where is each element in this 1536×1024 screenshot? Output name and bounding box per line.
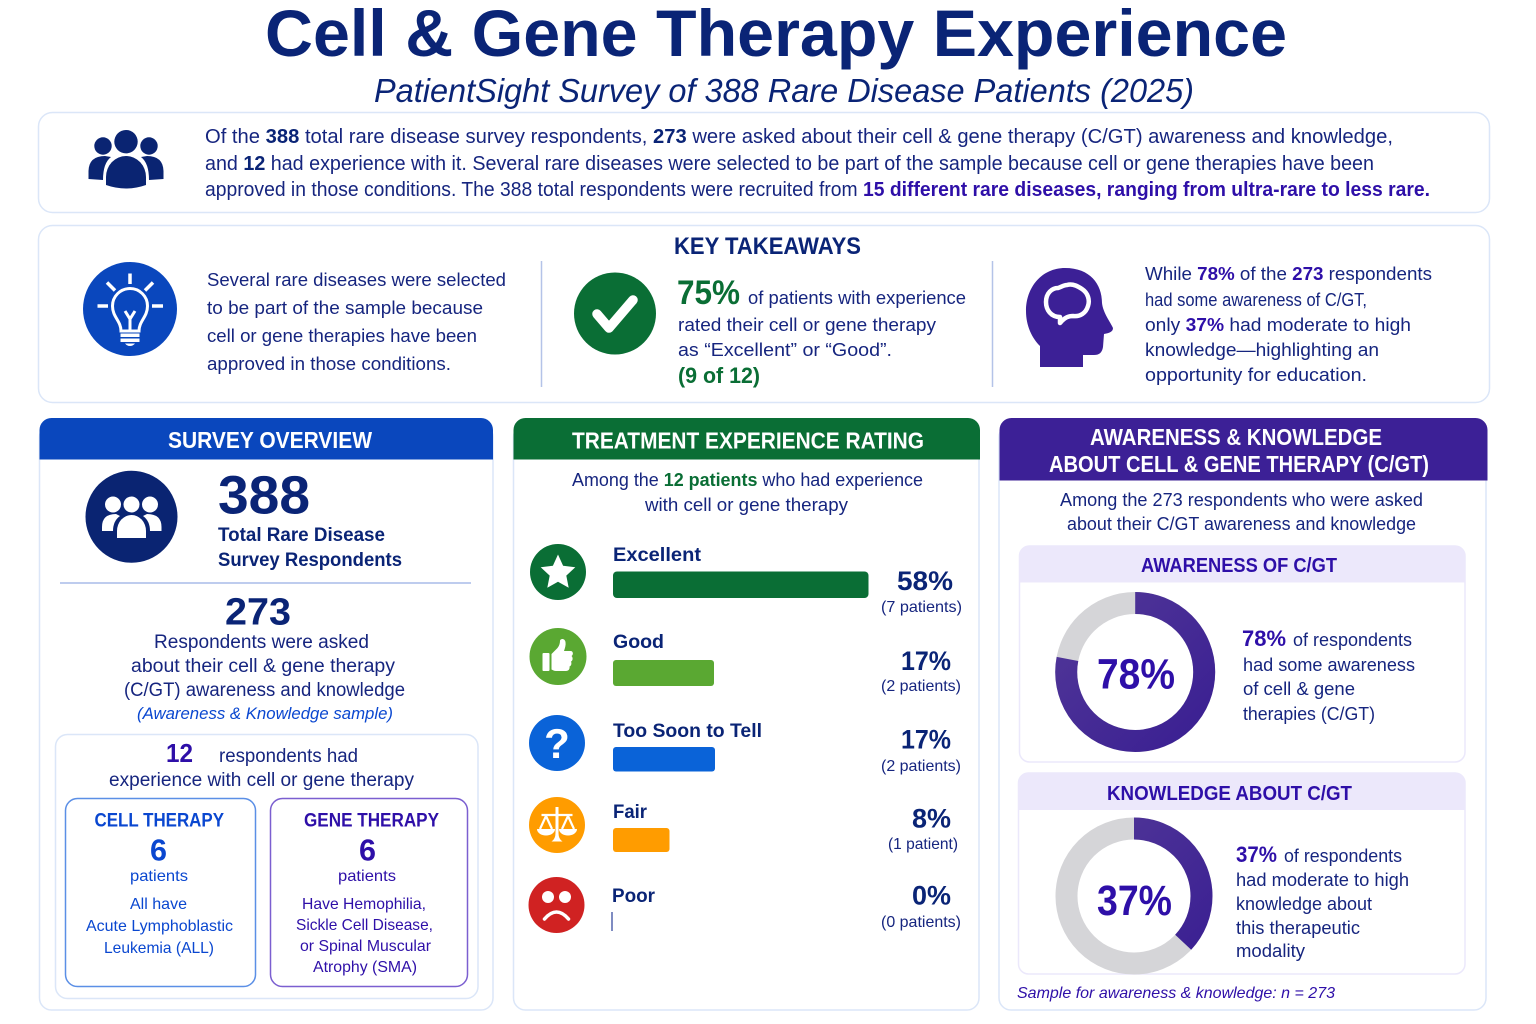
row: good: Good bbox=[613, 631, 664, 653]
panel: awareness and knowledge bbox=[999, 418, 1488, 1010]
awareness card header bbox=[1020, 546, 1465, 582]
card: gene therapy: 6 bbox=[359, 832, 376, 868]
row: good: (2 patients) bbox=[881, 678, 961, 695]
card: cell therapy bbox=[66, 798, 256, 986]
stat: 273 asked: Respondents were asked bbox=[154, 632, 369, 653]
stat: 273 asked: (Awareness & Knowledge sample) bbox=[137, 704, 393, 723]
takeaway text: awareness and knowledge bbox=[1145, 263, 1432, 385]
subtitle: PatientSight Survey of 388 Rare Disease Patients (2025) bbox=[374, 72, 1194, 109]
key takeaways heading: KEY TAKEAWAYS bbox=[674, 233, 861, 260]
awareness intro text: Among the 273 respondents who were asked bbox=[1060, 490, 1423, 510]
stat: 273 asked bbox=[124, 592, 405, 723]
row: fair bbox=[529, 797, 958, 853]
rating intro text: with cell or gene therapy bbox=[644, 495, 848, 515]
awareness description: 78% bbox=[1242, 626, 1286, 651]
knowledge card header: KNOWLEDGE ABOUT C/GT bbox=[1107, 783, 1352, 805]
row: good: 17% bbox=[901, 646, 951, 676]
awareness description: of cell & gene bbox=[1243, 679, 1355, 699]
row: poor: Poor bbox=[612, 885, 655, 907]
intro text: and 12 had experience with it. Several rare diseases were selected to be part of the sample because cell or gene therapies have been bbox=[205, 153, 1374, 175]
row: too soon to tell: ? bbox=[544, 720, 570, 767]
card: awareness of C/GT bbox=[1020, 546, 1465, 762]
knowledge description: 37% bbox=[1236, 842, 1277, 867]
row: too soon to tell: Too Soon to Tell bbox=[613, 720, 762, 742]
icon: respondents circle bbox=[86, 471, 178, 563]
takeaway text: sample selection: approved in those conditions. bbox=[207, 353, 451, 374]
icon: check mark bbox=[574, 272, 656, 354]
knowledge description: of respondents bbox=[1284, 846, 1402, 866]
stat: 273 asked: 273 bbox=[225, 592, 291, 634]
row: good bbox=[530, 628, 961, 695]
card: gene therapy: Have Hemophilia, bbox=[302, 896, 426, 913]
takeaway text: awareness and knowledge: knowledge—highlighting an bbox=[1145, 339, 1379, 360]
rating intro text: Among the 12 patients who had experience bbox=[572, 470, 923, 490]
stat: 12 respondents: 12 bbox=[166, 738, 193, 768]
panel: treatment experience rating bbox=[514, 418, 980, 1010]
rating intro text bbox=[572, 470, 923, 515]
knowledge description: modality bbox=[1236, 941, 1305, 961]
row: fair: 8% bbox=[912, 804, 951, 834]
awareness and knowledge header: ABOUT CELL & GENE THERAPY (C/GT) bbox=[1049, 451, 1429, 477]
awareness description bbox=[1242, 626, 1415, 724]
icon: head with thought bbox=[1026, 268, 1113, 367]
knowledge card header bbox=[1018, 773, 1465, 810]
card: cell therapy: Acute Lymphoblastic bbox=[86, 918, 233, 935]
row: excellent: Excellent bbox=[613, 544, 702, 566]
knowledge description bbox=[1236, 842, 1409, 961]
takeaway text: 75% rating: of patients with experience bbox=[748, 287, 966, 308]
awareness description: had some awareness bbox=[1243, 655, 1415, 675]
card: cell therapy: All have bbox=[130, 896, 187, 913]
knowledge description: this therapeutic bbox=[1236, 918, 1360, 938]
card: cell therapy: patients bbox=[130, 868, 188, 885]
donut: 78% aware: 78% bbox=[1097, 650, 1175, 698]
takeaway text: sample selection: cell or gene therapies have been bbox=[207, 325, 477, 346]
treatment rating header: TREATMENT EXPERIENCE RATING bbox=[572, 428, 924, 454]
stat: 388 total respondents: Total Rare Disease bbox=[218, 524, 385, 546]
stat: 388 total respondents: Survey Respondents bbox=[218, 549, 402, 571]
card: gene therapy bbox=[270, 798, 468, 986]
row: excellent bbox=[530, 544, 962, 616]
takeaway text: awareness and knowledge: only 37% had moderate to high bbox=[1145, 314, 1411, 335]
row: too soon to tell bbox=[529, 715, 961, 775]
takeaway text: sample selection: Several rare diseases were selected bbox=[207, 269, 506, 290]
row: poor: (0 patients) bbox=[881, 914, 961, 931]
row: fair: Fair bbox=[613, 801, 647, 823]
card: gene therapy: Sickle Cell Disease, bbox=[296, 917, 433, 934]
card: knowledge about C/GT bbox=[1018, 773, 1465, 974]
donut: 37% knowledge bbox=[1066, 828, 1202, 964]
row: too soon to tell: (2 patients) bbox=[881, 758, 961, 775]
stat: 388 total respondents: 388 bbox=[218, 466, 310, 526]
takeaway text: 75% rating: 75% bbox=[677, 274, 740, 312]
intro text bbox=[205, 126, 1430, 201]
card: cell therapy: Leukemia (ALL) bbox=[104, 940, 214, 957]
intro text: Of the 388 total rare disease survey respondents, 273 were asked about their cell & gene therapy (C/GT) awareness and knowledge, bbox=[205, 126, 1393, 148]
stat: 12 respondents: respondents had bbox=[219, 746, 358, 767]
takeaway text: sample selection bbox=[207, 269, 506, 374]
row: excellent: 58% bbox=[897, 566, 953, 596]
sample footnote: Sample for awareness & knowledge: n = 273 bbox=[1017, 985, 1335, 1002]
takeaway text: awareness and knowledge: opportunity for education. bbox=[1145, 364, 1367, 385]
survey overview header bbox=[40, 418, 493, 460]
card: cell therapy: 6 bbox=[150, 832, 167, 868]
icon: people group bbox=[88, 130, 164, 188]
row: excellent: (7 patients) bbox=[881, 599, 962, 616]
takeaway text: sample selection: to be part of the sample because bbox=[207, 297, 483, 318]
row: poor: 0% bbox=[912, 880, 951, 910]
donut: 37% knowledge: 37% bbox=[1097, 877, 1172, 925]
survey overview header: SURVEY OVERVIEW bbox=[168, 427, 372, 453]
takeaway text: 75% rating: (9 of 12) bbox=[678, 363, 760, 388]
stat: 12 respondents: experience with cell or gene therapy bbox=[109, 770, 414, 791]
icon: light bulb bbox=[83, 262, 177, 356]
row: poor bbox=[528, 877, 961, 933]
takeaway text: 75% rating: as “Excellent” or “Good”. bbox=[678, 339, 892, 360]
donut: 78% aware bbox=[1066, 603, 1204, 741]
treatment rating header bbox=[514, 418, 980, 460]
panel: 12 with experience bbox=[56, 734, 478, 998]
takeaway text: 75% rating bbox=[677, 274, 966, 388]
takeaway text: 75% rating: rated their cell or gene therapy bbox=[678, 314, 937, 335]
stat: 273 asked: about their cell & gene therapy bbox=[131, 656, 396, 677]
panel: survey overview bbox=[40, 418, 493, 1010]
stat: 388 total respondents bbox=[218, 466, 402, 571]
awareness and knowledge header bbox=[1000, 418, 1488, 480]
knowledge description: had moderate to high bbox=[1236, 870, 1409, 890]
awareness description: of respondents bbox=[1293, 630, 1412, 650]
card: cell therapy: CELL THERAPY bbox=[94, 810, 224, 832]
intro text: approved in those conditions. The 388 total respondents were recruited from 15 different rare diseases, ranging from ultra-rare to less rare. bbox=[205, 179, 1430, 201]
stat: 273 asked: (C/GT) awareness and knowledge bbox=[124, 680, 405, 701]
card: gene therapy: Atrophy (SMA) bbox=[313, 959, 417, 976]
awareness and knowledge header: AWARENESS & KNOWLEDGE bbox=[1090, 424, 1382, 450]
panel: introduction bbox=[38, 112, 1490, 212]
row: fair: (1 patient) bbox=[888, 836, 958, 853]
card: gene therapy: GENE THERAPY bbox=[304, 810, 439, 832]
takeaway text: awareness and knowledge: had some awareness of C/GT, bbox=[1145, 289, 1367, 310]
row: too soon to tell: 17% bbox=[901, 724, 951, 754]
takeaway text: awareness and knowledge: While 78% of the 273 respondents bbox=[1145, 263, 1432, 284]
card: gene therapy: patients bbox=[338, 868, 396, 885]
card: gene therapy: or Spinal Muscular bbox=[300, 938, 432, 955]
awareness description: therapies (C/GT) bbox=[1243, 704, 1375, 724]
stat: 12 respondents bbox=[109, 738, 414, 791]
knowledge description: knowledge about bbox=[1236, 894, 1372, 914]
panel: key takeaways bbox=[38, 226, 1490, 402]
awareness intro text bbox=[1060, 490, 1423, 534]
awareness card header: AWARENESS OF C/GT bbox=[1141, 555, 1337, 577]
awareness intro text: about their C/GT awareness and knowledge bbox=[1067, 514, 1416, 534]
